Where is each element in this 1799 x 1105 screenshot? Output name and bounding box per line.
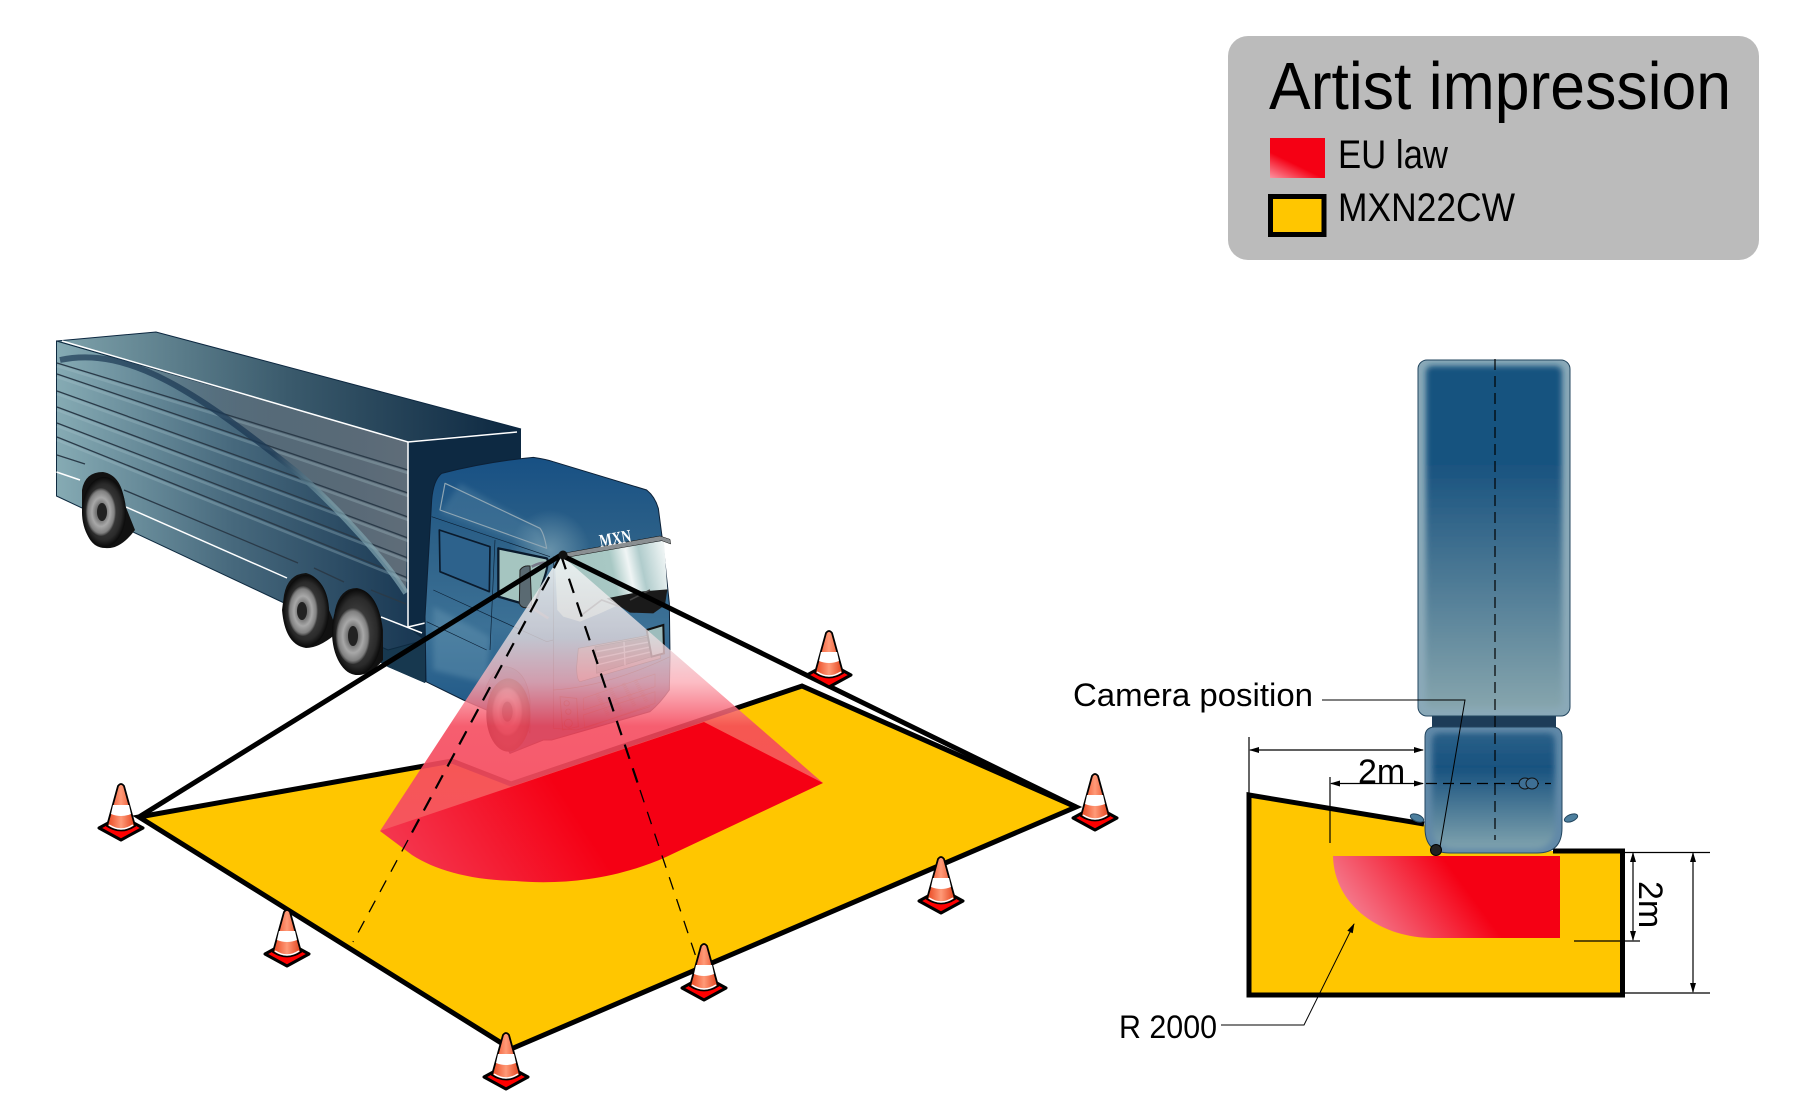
cab panel lines (427, 517, 553, 728)
steering wheel marks (1519, 778, 1538, 789)
yellow ground area: MXN22CW perspective (139, 686, 1076, 1049)
front trailer-side wheel (332, 588, 383, 675)
trailer front face and chassis (300, 429, 521, 683)
trailer (1418, 360, 1570, 716)
legend title: Artist impression (1269, 49, 1731, 124)
dimension: width to area edge (1249, 737, 1423, 795)
R 2000 leader (1221, 924, 1354, 1025)
upper grille (577, 630, 661, 682)
cone 5 (919, 857, 963, 913)
front wheel (485, 667, 530, 752)
legend swatch: EU law (1270, 138, 1325, 178)
sun visor (552, 536, 671, 558)
legend panel (1228, 36, 1759, 260)
dimension: 2m vertical (1574, 852, 1710, 993)
traffic cones (99, 631, 1117, 1089)
camera position leader (1322, 700, 1465, 847)
door window (498, 548, 548, 607)
dashed sight line: right (561, 555, 697, 960)
rear wheel (82, 472, 135, 548)
cone 6 (1073, 774, 1117, 830)
trailer top face (56, 332, 521, 442)
roof side window outline (440, 483, 547, 548)
cone 7 (807, 631, 851, 687)
cone 4 (682, 944, 726, 1000)
side window (439, 530, 490, 592)
cab (1425, 727, 1562, 853)
side mirror (519, 566, 532, 608)
label: R 2000: R 2000 (1119, 1009, 1217, 1045)
wiper and dark lower screen (607, 589, 667, 613)
bumper lines (553, 657, 670, 730)
trailer side face (56, 341, 425, 650)
top view: truck (1409, 359, 1579, 853)
dimension: 2m horizontal (1330, 777, 1423, 843)
trailer side stripes (57, 366, 408, 581)
dashed sight line: left (353, 555, 561, 942)
truck: perspective view (56, 332, 671, 753)
cone 1 (99, 784, 143, 840)
left mirror (1409, 812, 1425, 824)
EU law visible area on ground (380, 722, 823, 882)
hitch (1432, 714, 1556, 730)
trailer white edge lines (56, 341, 517, 633)
label: 2m horizontal: 2m (1358, 753, 1405, 791)
truck cab (425, 457, 671, 753)
middle wheel (282, 573, 338, 648)
legend label: EU law: EU law (1338, 133, 1448, 177)
black sight lines from camera (139, 555, 1076, 817)
camera view cone (380, 555, 823, 831)
label: camera position: Camera position (1073, 677, 1313, 713)
centre lines (1426, 359, 1551, 840)
legend swatch: MXN22CW (1270, 196, 1324, 234)
cone 3 (484, 1033, 528, 1089)
lower grille (583, 674, 655, 728)
legend label: MXN22CW: MXN22CW (1338, 186, 1515, 230)
top view: yellow MXN22CW area (1249, 795, 1622, 995)
brand logo MXN: MXN (598, 526, 633, 551)
camera position marker (1430, 844, 1442, 856)
cone 2 (265, 910, 309, 966)
dark side window on front (647, 625, 664, 657)
windscreen (555, 541, 667, 622)
label: 2m vertical: 2m (1631, 881, 1669, 928)
headlight (560, 697, 578, 730)
right mirror (1563, 812, 1579, 824)
top view: red EU law area (1333, 856, 1560, 938)
camera dot on truck (558, 550, 568, 560)
